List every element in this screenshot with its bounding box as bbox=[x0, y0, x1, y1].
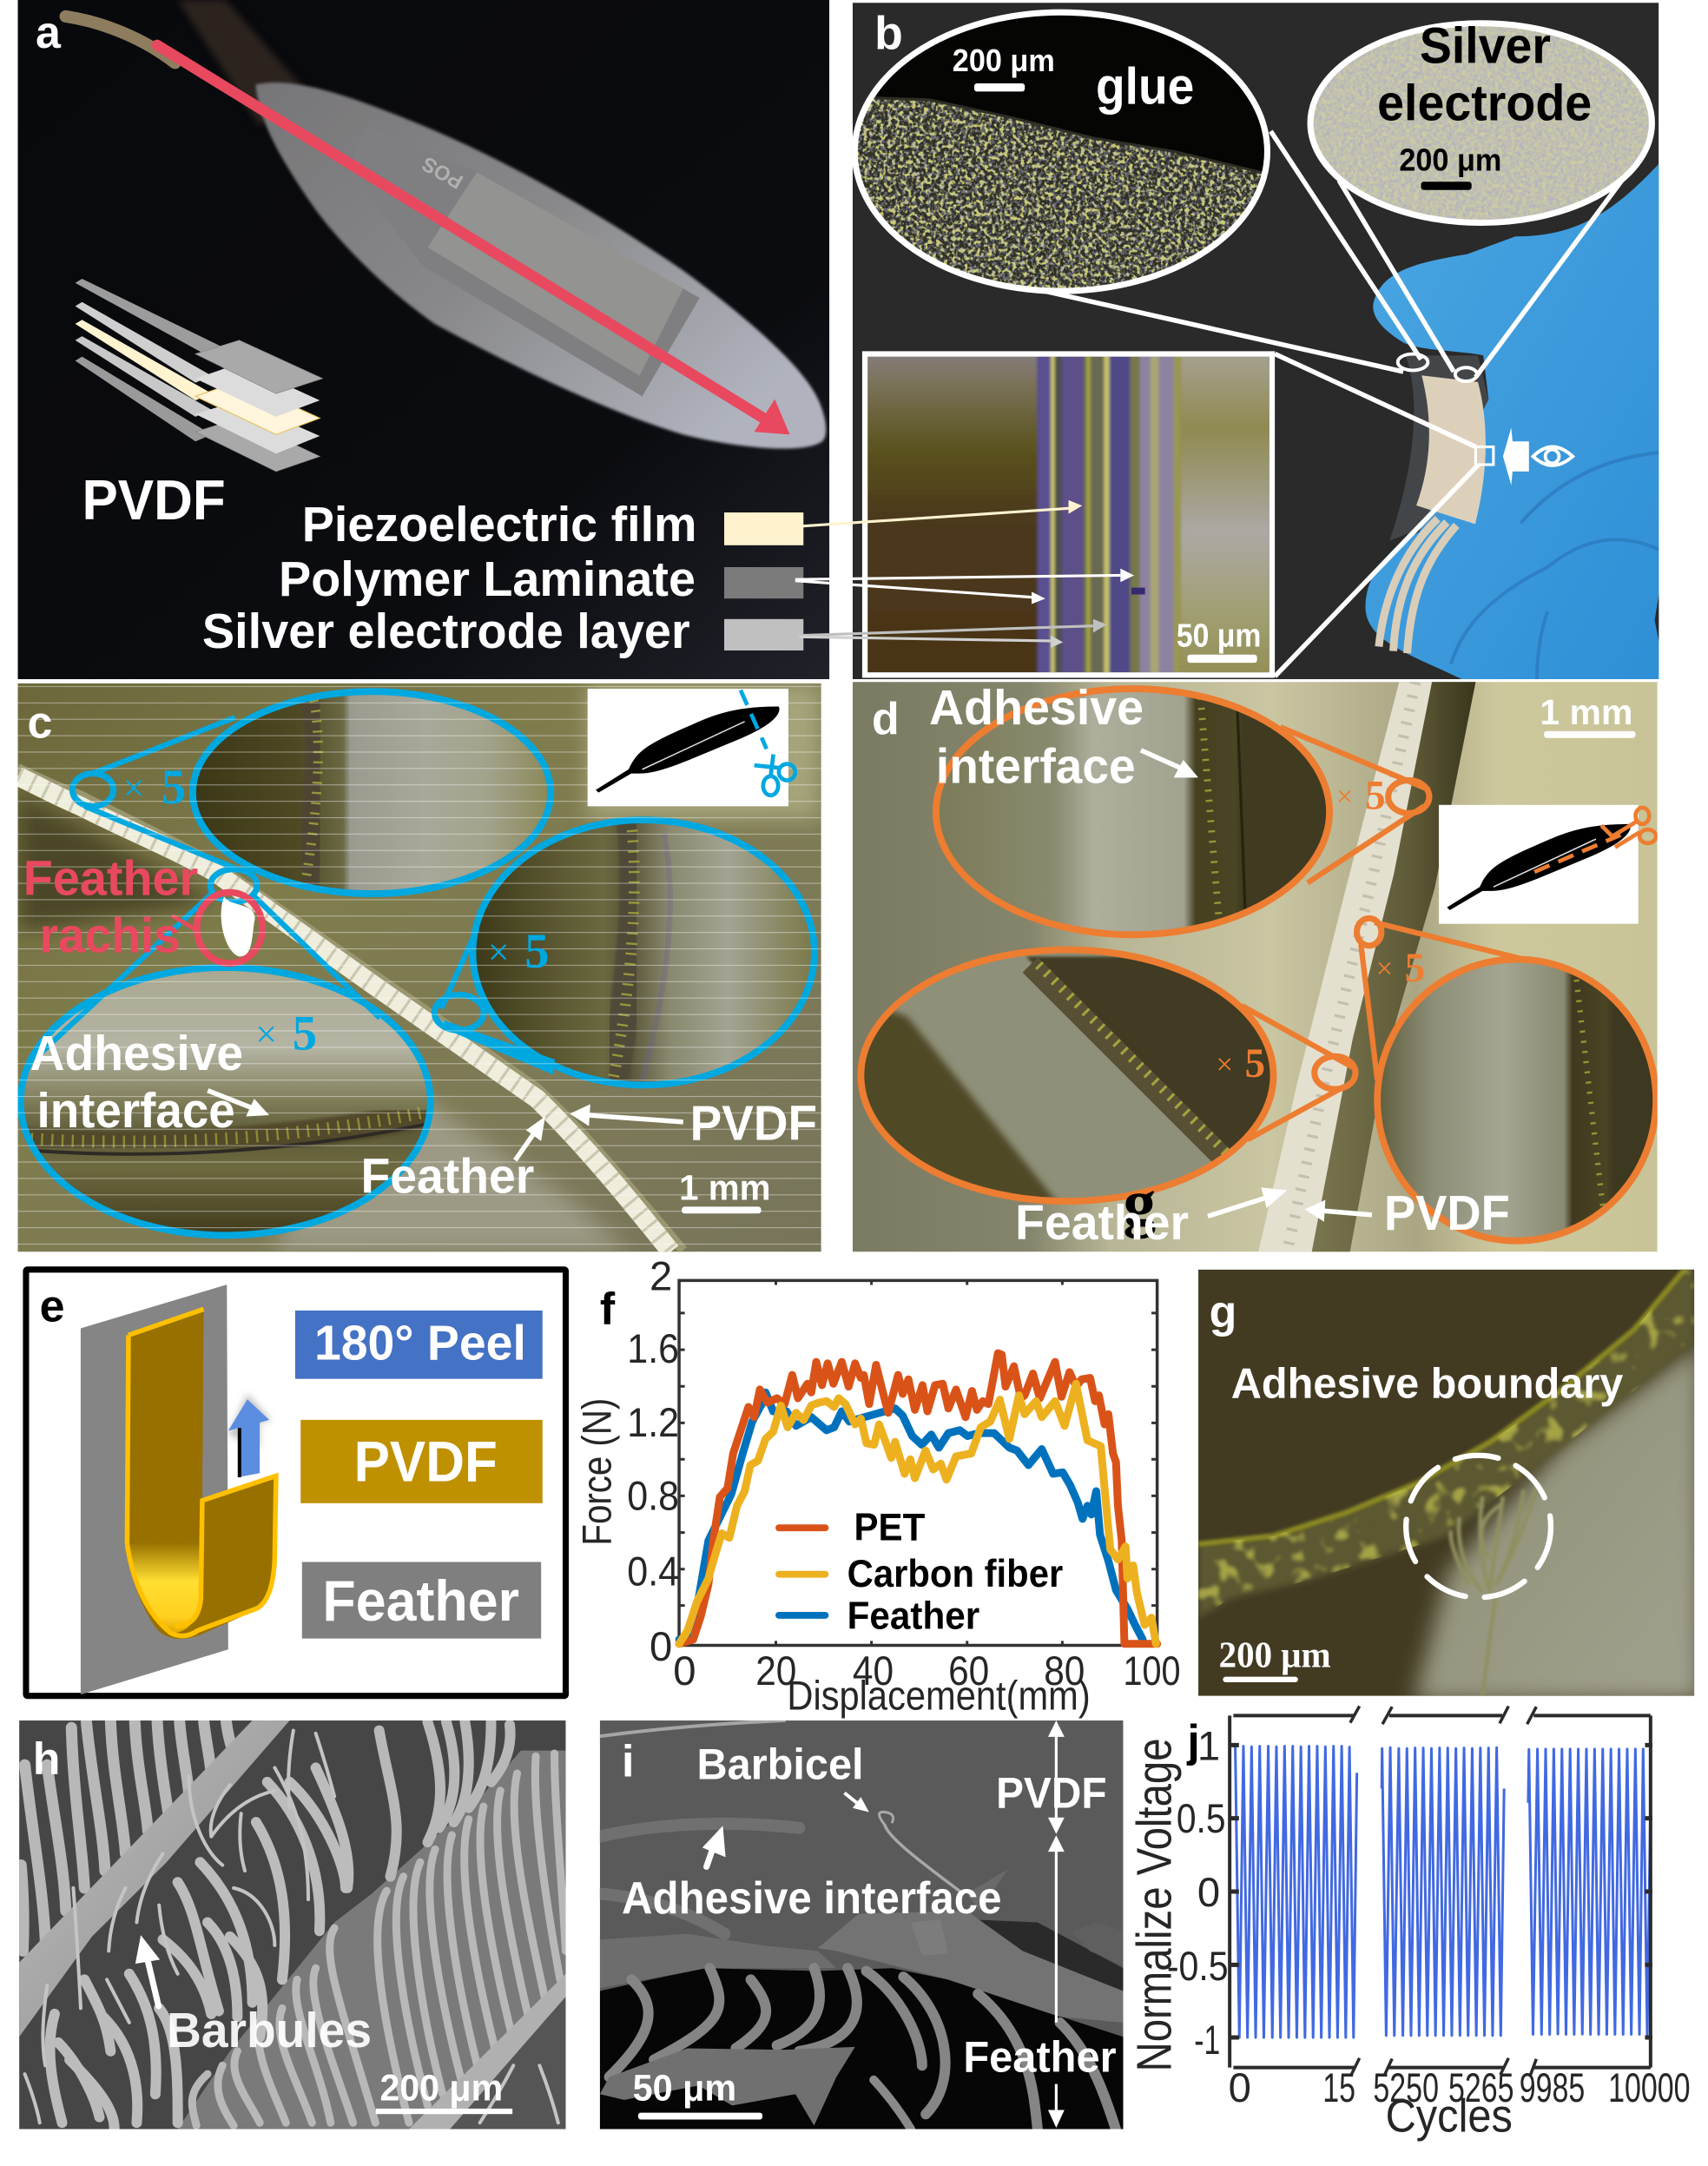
feather and PVDF ribbon bbox=[18, 768, 683, 1251]
panel a: feather with PVDF bbox=[18, 0, 829, 679]
y axis tick labels: 2 bbox=[650, 1253, 672, 1299]
x axis tick labels j bbox=[1229, 2065, 1690, 2111]
magnification 2 bbox=[488, 925, 550, 979]
PVDF layer stack icon bbox=[76, 279, 322, 472]
stray black g: g bbox=[1123, 1167, 1156, 1239]
label PVDF: PVDF bbox=[690, 1096, 817, 1151]
magnification 2: 5 bbox=[524, 925, 550, 979]
zoom lines and source circles bbox=[1242, 727, 1524, 1139]
curve: feather bbox=[679, 1392, 1143, 1640]
curve: PET bbox=[679, 1353, 1157, 1644]
y axis tick labels j: -0.5 bbox=[1167, 1944, 1229, 1990]
dark olive strip bbox=[1312, 682, 1475, 1251]
x axis tick labels j: 0 bbox=[1229, 2065, 1251, 2111]
arrow to PVDF d bbox=[1305, 1200, 1372, 1222]
legend: Feather bbox=[847, 1595, 979, 1638]
magnification d3 bbox=[1376, 946, 1425, 991]
label adhesive interface i: Adhesive interface bbox=[622, 1873, 1001, 1924]
scale bar g bbox=[1223, 1677, 1298, 1682]
axes with breaks bbox=[1230, 1707, 1652, 2077]
zoom ellipse 3 bbox=[21, 967, 431, 1235]
feather body bbox=[255, 83, 826, 449]
icon: eye bbox=[1533, 447, 1573, 466]
y axis tick labels j bbox=[1167, 1724, 1229, 2064]
icon: scissors c bbox=[741, 690, 795, 796]
y axis tick labels: 0.4 bbox=[627, 1549, 679, 1595]
y axis title j: Normalize Voltage bbox=[1128, 1738, 1183, 2071]
adhesive interface arrow bbox=[702, 1826, 726, 1866]
scale text d: 1 mm bbox=[1540, 692, 1632, 732]
label adhesive boundary: Adhesive boundary bbox=[1231, 1361, 1623, 1408]
panel c background bbox=[18, 683, 821, 1251]
label barbicel: Barbicel bbox=[697, 1740, 864, 1789]
horizontal scan artefact lines bbox=[18, 683, 821, 1251]
label silver: Silver bbox=[1420, 17, 1551, 74]
x axis tick labels: 60 bbox=[948, 1648, 989, 1694]
x axis tick labels j: 15 bbox=[1322, 2065, 1355, 2111]
y axis tick labels j: -1 bbox=[1194, 2017, 1220, 2064]
legend arrows into inset bbox=[795, 500, 1134, 648]
label feather rachis: Feather bbox=[23, 852, 198, 907]
light region lower right bbox=[274, 1053, 629, 1251]
SEM structures bbox=[600, 1720, 1124, 2129]
zoom lines and source circles bbox=[34, 717, 553, 1073]
panel label h: h bbox=[33, 1733, 61, 1784]
panel f: force displacement chart bbox=[574, 1253, 1181, 1719]
scale bar i bbox=[638, 2113, 762, 2120]
magnification d2: 5 bbox=[1245, 1041, 1265, 1086]
x axis tick labels: 0 bbox=[673, 1648, 696, 1694]
dark background bbox=[1198, 1270, 1694, 1696]
barbicel arrow bbox=[844, 1793, 869, 1812]
panel label f: f bbox=[600, 1284, 616, 1335]
x axis tick labels: 20 bbox=[755, 1648, 796, 1694]
small sampling ellipse left bbox=[1398, 354, 1428, 370]
legend swatch: silver bbox=[724, 619, 803, 650]
x axis tick labels j: 9985 bbox=[1520, 2065, 1585, 2111]
grey feather plate bbox=[81, 1284, 228, 1694]
thickness arrows bbox=[1048, 1720, 1065, 2128]
label glue: glue bbox=[1096, 57, 1194, 116]
magnification d2: × bbox=[1216, 1048, 1233, 1081]
light region top right bbox=[588, 683, 821, 820]
arrow to adhesive interface bbox=[208, 1091, 269, 1117]
legend: PET bbox=[854, 1506, 925, 1549]
POS lettering: POS bbox=[419, 151, 467, 193]
signal traces bbox=[1236, 1745, 1651, 2037]
icon: feather d bbox=[1447, 824, 1631, 910]
y axis tick labels bbox=[627, 1253, 679, 1670]
panel j: cycling chart bbox=[1128, 1707, 1690, 2143]
y axis tick labels: 1.6 bbox=[627, 1326, 679, 1372]
y axis title: Force (N) bbox=[574, 1398, 620, 1546]
feather strip ribs bbox=[1287, 682, 1415, 1251]
panel label b: b bbox=[874, 9, 903, 60]
scale bar c bbox=[682, 1206, 762, 1213]
panel h: SEM of barbules bbox=[19, 1720, 565, 2130]
scale bar h bbox=[376, 2109, 512, 2114]
feather strip bbox=[1258, 682, 1432, 1251]
frame e bbox=[26, 1270, 565, 1696]
zoom ellipse 1 bbox=[193, 690, 551, 895]
arrow to barbules bbox=[135, 1935, 160, 2006]
tag 180 peel: 180° Peel bbox=[314, 1317, 526, 1371]
panel c: cross section across rachis bbox=[18, 683, 821, 1251]
panel label d: d bbox=[872, 694, 900, 744]
film outer laminate bbox=[443, 271, 700, 396]
magnification d1: × bbox=[1336, 780, 1353, 813]
icon: scissors d bbox=[1534, 808, 1656, 872]
red rachis circle with white core bbox=[172, 892, 262, 963]
zoom circle: silver electrode bbox=[1305, 21, 1660, 226]
label electrode: electrode bbox=[1377, 75, 1592, 131]
x axis title: Displacement(mm) bbox=[787, 1673, 1091, 1719]
legend text: piezoelectric film: Piezoelectric film bbox=[302, 498, 697, 552]
label rachis: rachis bbox=[40, 909, 181, 964]
y axis tick labels j: 0 bbox=[1197, 1870, 1220, 1916]
icon: feather c bbox=[596, 707, 780, 793]
legend text: silver electrode layer: Silver electrode layer bbox=[202, 604, 690, 659]
y axis tick labels: 0 bbox=[650, 1624, 672, 1670]
panel d background bbox=[853, 682, 1658, 1251]
small sampling ellipse right bbox=[1455, 367, 1477, 381]
scale text inset: 50 μm bbox=[1177, 617, 1261, 654]
legend: Carbon fiber bbox=[847, 1553, 1063, 1595]
panel label a: a bbox=[36, 8, 62, 58]
magnification 1: × bbox=[123, 767, 145, 809]
zoom ellipse d3 bbox=[1377, 960, 1656, 1241]
tag PVDF: PVDF bbox=[354, 1430, 498, 1495]
gold PVDF strip bbox=[127, 1309, 276, 1639]
arrow to PVDF bbox=[570, 1104, 683, 1126]
x axis tick labels j: 5250 bbox=[1373, 2065, 1439, 2111]
panel label c: c bbox=[28, 698, 52, 749]
y axis tick labels j: 0.5 bbox=[1177, 1796, 1225, 1842]
magnification d3: × bbox=[1376, 953, 1393, 986]
label adhesive d: Adhesive bbox=[929, 681, 1144, 736]
x axis tick labels: 80 bbox=[1044, 1648, 1085, 1694]
panel label e: e bbox=[40, 1282, 65, 1332]
legend bbox=[779, 1506, 1063, 1638]
tag feather: Feather bbox=[322, 1569, 519, 1634]
y axis tick labels j: 1 bbox=[1197, 1724, 1220, 1770]
scale text silver: 200 μm bbox=[1399, 142, 1501, 178]
label feather d: Feather bbox=[1015, 1196, 1189, 1251]
film silver region bbox=[428, 172, 683, 376]
curve: carbon fiber bbox=[679, 1383, 1156, 1644]
adhesive band bbox=[1198, 1270, 1694, 1625]
y axis tick labels: 1.2 bbox=[627, 1400, 679, 1446]
legend swatch: laminate bbox=[724, 567, 803, 598]
panel g: adhesive boundary micrograph bbox=[1198, 1270, 1701, 1701]
zoom circle: glue bbox=[847, 12, 1284, 300]
optical cross-section inset bbox=[854, 341, 1284, 690]
white inset box d bbox=[1439, 805, 1639, 924]
panel i: SEM of adhesive interface bbox=[600, 1720, 1124, 2130]
legend swatch: piezoelectric bbox=[724, 512, 803, 545]
magnification 2: × bbox=[488, 931, 510, 974]
label adhesive: Adhesive bbox=[30, 1027, 243, 1081]
panel a background bbox=[18, 0, 829, 679]
red arrow along rachis bbox=[157, 45, 790, 434]
magnification d1: 5 bbox=[1365, 774, 1386, 819]
callout lines bbox=[1039, 131, 1622, 677]
arrow to feather d bbox=[1208, 1187, 1287, 1216]
quill stem bbox=[66, 17, 175, 63]
arrow to feather bbox=[515, 1117, 545, 1160]
dark laminate tails bbox=[178, 0, 307, 126]
panel label j: j bbox=[1186, 1716, 1200, 1766]
legend text: polymer laminate: Polymer Laminate bbox=[279, 552, 696, 607]
panel e: 180 degree peel schematic bbox=[26, 1270, 565, 1696]
panel label i: i bbox=[622, 1737, 634, 1787]
panel b background bbox=[853, 3, 1659, 679]
scale text i: 50 μm bbox=[633, 2068, 736, 2109]
panel d: longitudinal section bbox=[853, 681, 1658, 1251]
chart frame and ticks bbox=[679, 1280, 1157, 1645]
white view arrow bbox=[1503, 428, 1529, 485]
grey background bbox=[600, 1720, 1123, 2130]
label interface d: interface bbox=[936, 740, 1136, 795]
magnification 3 bbox=[255, 1007, 317, 1060]
blue pull arrow bbox=[228, 1394, 272, 1477]
magnification 1: 5 bbox=[162, 761, 186, 815]
zoom ellipse d1 bbox=[936, 687, 1329, 934]
white inset box bbox=[588, 689, 788, 806]
light feather region bbox=[1415, 1344, 1701, 1701]
magnification d1 bbox=[1336, 774, 1386, 819]
scale text glue: 200 μm bbox=[953, 43, 1055, 78]
tag PVDF bbox=[300, 1420, 543, 1503]
x axis title j: Cycles bbox=[1386, 2091, 1513, 2143]
magnification 3: 5 bbox=[293, 1007, 317, 1060]
scale text g: 200 μm bbox=[1219, 1635, 1331, 1676]
scale text h: 200 μm bbox=[379, 2068, 503, 2109]
label PVDF i: PVDF bbox=[996, 1768, 1107, 1818]
y axis tick labels: 0.8 bbox=[627, 1474, 679, 1520]
panel b: bent device in gloved hand bbox=[847, 3, 1660, 690]
x axis tick labels j: 5265 bbox=[1448, 2065, 1514, 2111]
x axis tick labels: 100 bbox=[1123, 1648, 1181, 1694]
scale bar silver bbox=[1421, 182, 1472, 190]
barbule tuft bbox=[1451, 1483, 1537, 1696]
scale text c: 1 mm bbox=[679, 1168, 771, 1208]
label feather i: Feather bbox=[963, 2031, 1117, 2081]
magnification 3: × bbox=[255, 1013, 277, 1055]
zoom ellipse 2 bbox=[472, 820, 814, 1085]
dashed circle bbox=[1406, 1456, 1551, 1597]
scale bar d bbox=[1544, 731, 1636, 738]
label PVDF d: PVDF bbox=[1384, 1186, 1510, 1241]
dark background bbox=[19, 1720, 565, 2130]
arrow to interface d bbox=[1141, 750, 1198, 777]
scale bar glue bbox=[974, 83, 1025, 91]
x axis tick labels bbox=[673, 1648, 1181, 1694]
label feather: Feather bbox=[360, 1150, 534, 1205]
zoom ellipse d2 bbox=[854, 950, 1284, 1203]
PVDF caption: PVDF bbox=[82, 469, 226, 532]
blue glove bbox=[1365, 163, 1659, 682]
label interface: interface bbox=[37, 1084, 235, 1139]
scale bar inset bbox=[1187, 655, 1257, 663]
SEM structures bbox=[19, 1720, 565, 2129]
magnification 1 bbox=[123, 761, 186, 815]
panel label g: g bbox=[1210, 1287, 1236, 1337]
magnification d3: 5 bbox=[1405, 946, 1425, 991]
x axis tick labels: 40 bbox=[853, 1648, 894, 1694]
label barbules: Barbules bbox=[167, 2004, 372, 2058]
small sampling square bbox=[1475, 447, 1494, 465]
magnification d2 bbox=[1216, 1041, 1265, 1086]
dark region lower left of ribbon bbox=[18, 793, 219, 929]
